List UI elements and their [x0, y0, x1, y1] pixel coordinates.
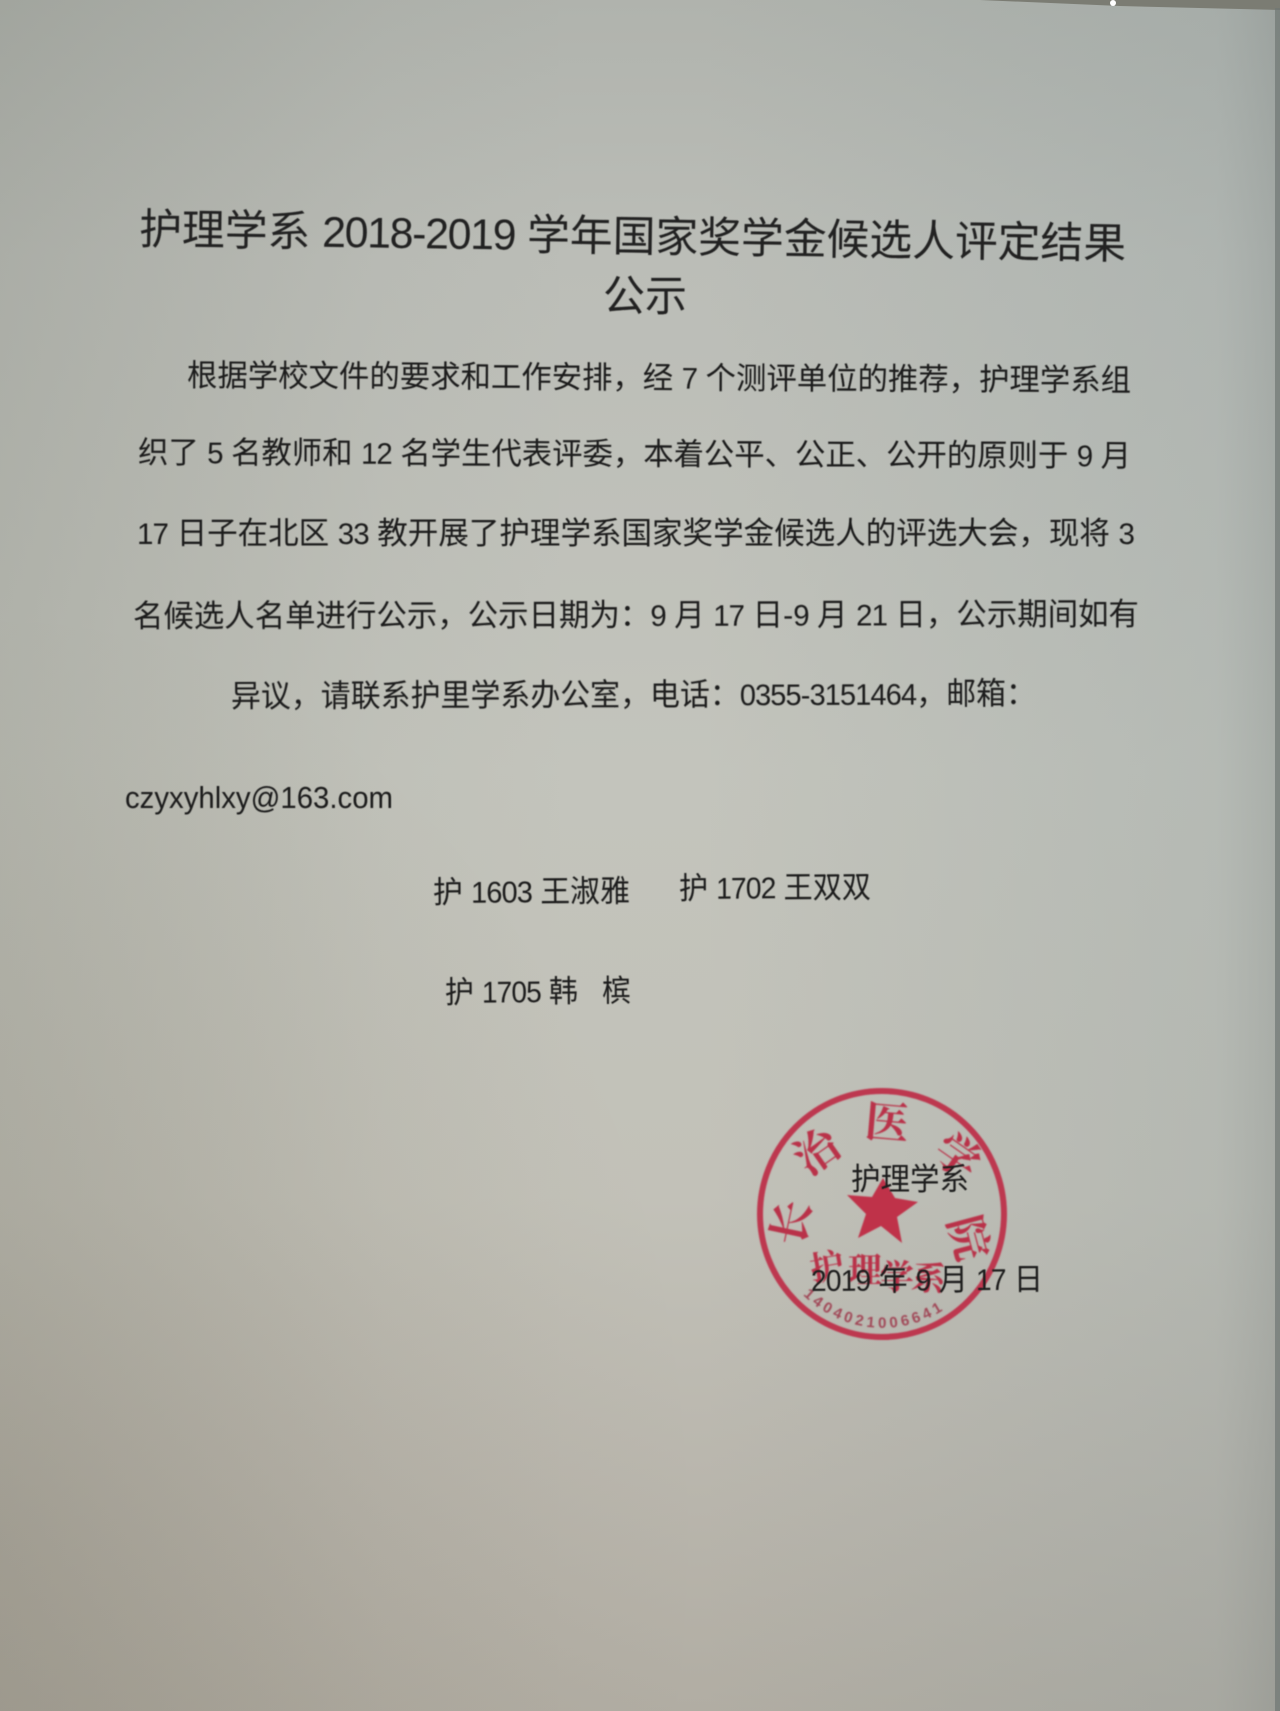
email: czyxyhlxy@163.com — [125, 780, 393, 815]
seal character: 治: 治 — [785, 1117, 853, 1185]
seal number: 1404021006641 — [803, 1288, 944, 1329]
body paragraph — [133, 358, 1139, 714]
official seal — [756, 1087, 1008, 1341]
seal character: 学: 学 — [925, 1125, 989, 1190]
body paragraph: 17 日子在北区 33 教开展了护理学系国家奖学金候选人的评选大会，现将 3 — [137, 516, 1134, 551]
title — [139, 206, 1126, 321]
seal character: 医: 医 — [863, 1097, 911, 1150]
title: 护理学系 2018-2019 学年国家奖学金候选人评定结果 — [139, 206, 1126, 269]
seal star — [847, 1178, 918, 1243]
seal lower text: 护 — [807, 1246, 847, 1290]
seal character: 长: 长 — [764, 1196, 821, 1250]
body paragraph: 名候选人名单进行公示，公示日期为：9 月 17 日-9 月 21 日，公示期间如有 — [133, 597, 1139, 634]
title: 公示 — [603, 273, 687, 321]
body paragraph: 异议，请联系护里学系办公室，电话：0355-3151464，邮箱： — [231, 676, 1036, 714]
candidate: 护1705 韩槟: 护 1705 韩 槟 — [445, 973, 631, 1010]
seal lower text: 学 — [880, 1259, 914, 1297]
signature: date: 2019 年 9 月 17 日 — [811, 1262, 1043, 1298]
seal ring — [760, 1091, 1004, 1337]
seal lower text: 理 — [848, 1253, 882, 1290]
seal lower text — [807, 1246, 949, 1300]
seal character: 院: 院 — [938, 1211, 997, 1266]
seal lower text: 系 — [909, 1258, 949, 1300]
body paragraph: 织了 5 名教师和 12 名学生代表评委，本着公平、公正、公开的原则于 9 月 — [138, 435, 1131, 473]
candidate: 护1702 王双双: 护 1702 王双双 — [679, 870, 871, 906]
body paragraph: 根据学校文件的要求和工作安排，经 7 个测评单位的推荐，护理学系组 — [187, 358, 1131, 398]
signature: department: 护理学系 — [851, 1162, 969, 1197]
candidate: 护1603 王淑雅: 护 1603 王淑雅 — [433, 874, 630, 910]
